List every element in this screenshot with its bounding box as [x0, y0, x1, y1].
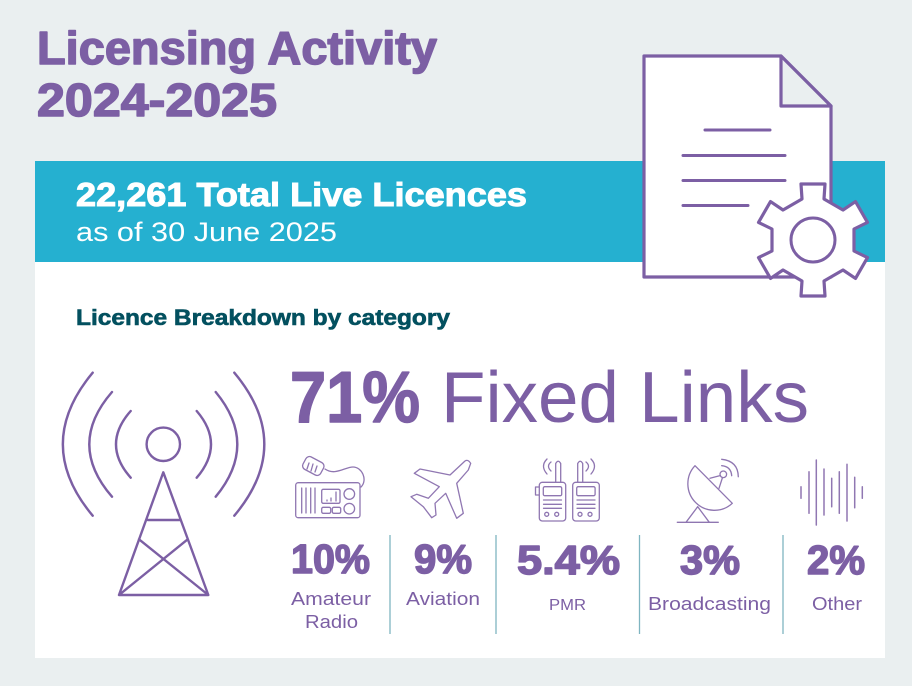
stat: aviation — [406, 536, 480, 609]
icon: amateur radio — [296, 455, 364, 518]
stat: amateur radio: 10% — [291, 536, 370, 582]
banner: total live licences: as of 30 June 2025 — [76, 217, 337, 247]
stat: amateur radio: Amateur — [291, 589, 371, 609]
stat: other — [807, 537, 865, 614]
stat: broadcasting: Broadcasting — [648, 594, 771, 614]
stat: PMR: 5.4% — [517, 537, 620, 583]
stat: other: 2% — [807, 537, 865, 583]
heading: licence breakdown: Licence Breakdown by category — [76, 305, 451, 330]
stat: broadcasting — [648, 537, 771, 614]
panel: white background — [35, 262, 885, 658]
stat: aviation: 9% — [414, 536, 472, 582]
icon: radio tower — [63, 373, 264, 595]
title — [37, 22, 437, 126]
stat: broadcasting: 3% — [680, 537, 740, 583]
stat: PMR — [517, 537, 620, 614]
stat: amateur radio: Radio — [305, 612, 358, 632]
stat: PMR: PMR — [549, 597, 586, 614]
icon: airplane — [411, 460, 471, 518]
headline stat: 71% fixed links: Fixed Links — [441, 358, 809, 438]
banner: total live licences: 22,261 Total Live Licences — [76, 176, 527, 213]
icon: PMR handsets — [536, 459, 599, 521]
stat: aviation: Aviation — [406, 589, 480, 609]
title: Licensing Activity — [37, 22, 437, 74]
stat: other: Other — [812, 594, 862, 614]
banner: total live licences — [35, 161, 885, 262]
icon: satellite dish — [677, 459, 738, 522]
icon: waveform — [801, 460, 862, 525]
stat: amateur radio — [291, 536, 371, 632]
icon: document with gear — [644, 56, 868, 296]
headline stat: 71% fixed links: 71% — [290, 358, 420, 438]
title: 2024-2025 — [37, 74, 277, 126]
